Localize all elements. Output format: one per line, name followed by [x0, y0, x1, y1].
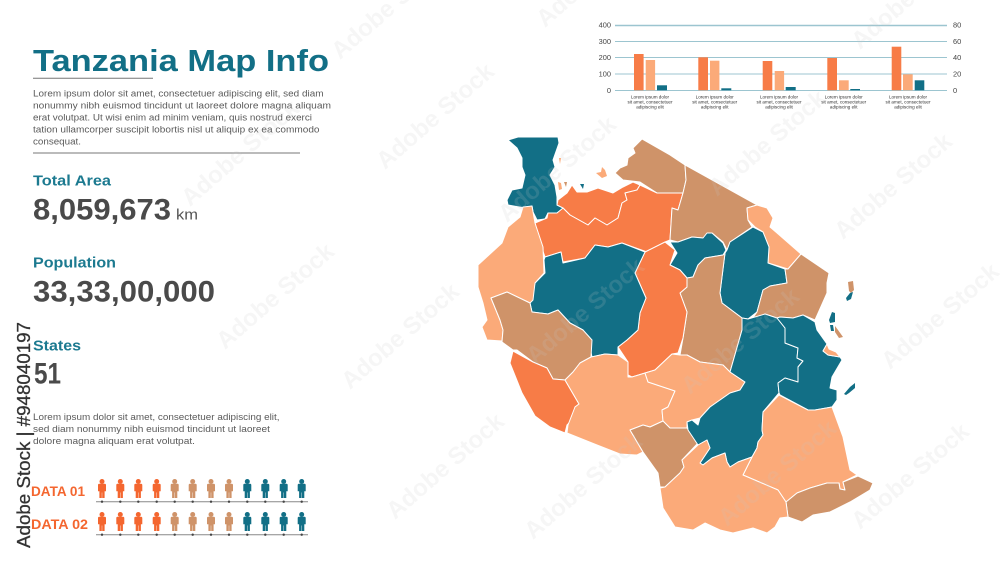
region: small southern tan [630, 421, 698, 487]
watermark: Adobe Stock [846, 417, 975, 535]
region: small coast peach [823, 344, 840, 357]
left axis labels: 400 [599, 20, 611, 30]
lower paragraph [33, 412, 280, 447]
pictogram row: data 02: DATA 02 [31, 516, 88, 532]
region: coast peach [747, 205, 801, 269]
left axis labels: 200 [599, 53, 611, 62]
left axis labels: 100 [599, 70, 611, 78]
left axis labels: 300 [599, 37, 611, 46]
bar captions: Lorem ipsum dolor [760, 94, 798, 100]
bar captions: adipiscing elit [894, 104, 923, 110]
region: central orange [618, 242, 687, 377]
region: lake orange [557, 182, 640, 225]
region: inland teal north-east [720, 227, 787, 319]
region: small teal [670, 233, 726, 278]
lower paragraph: sed diam nonummy nibh euismod tincidunt ut laoreet [33, 424, 270, 435]
region: south-west orange [510, 351, 579, 433]
stat: total area: km [176, 206, 198, 223]
right axis labels: 80 [953, 20, 961, 30]
region: central tan [680, 253, 742, 372]
right axis labels [953, 20, 961, 95]
region: long teal [687, 314, 803, 467]
bar captions: adipiscing elit [830, 104, 858, 110]
region: north tan [615, 139, 686, 193]
bar captions: adipiscing elit [701, 104, 729, 110]
bars group 4 [827, 58, 860, 90]
bar captions: sit amet, consectetuer [821, 100, 867, 104]
pictogram row: data 02 [31, 512, 308, 536]
region: south-east tan [786, 476, 873, 522]
watermark: Adobe Stock [713, 414, 842, 532]
right axis labels: 40 [953, 53, 961, 62]
stat: population: Population [33, 254, 116, 271]
bar captions: sit amet, consectetuer [692, 100, 738, 104]
bars group 5 [892, 47, 924, 90]
bars group 2 [698, 57, 731, 90]
right axis labels: 60 [953, 37, 961, 46]
right axis labels: 0 [953, 86, 957, 95]
left axis labels: 0 [607, 86, 611, 95]
pictogram row: data 01 [31, 479, 308, 503]
region: western peach [478, 206, 544, 341]
bar captions: Lorem ipsum dolor [889, 94, 927, 100]
stat: total area: Total Area [33, 172, 112, 189]
pictogram row: data 01: DATA 01 [31, 483, 85, 499]
watermark: Adobe Stock [676, 282, 805, 400]
bar chart [599, 20, 961, 110]
watermark: Adobe Stock [829, 127, 958, 245]
region: north-west teal [507, 137, 564, 220]
intro paragraph [33, 88, 331, 148]
stat: total area: 8,059,673 [33, 193, 171, 226]
intro paragraph: tation ullamcorper suscipit lobortis nisl ut aliquip ex ea commodo [33, 124, 320, 136]
region: large western teal [530, 243, 646, 357]
bar captions: Lorem ipsum dolor [631, 94, 669, 100]
bars group 1 [634, 54, 667, 90]
region: south-central peach [645, 354, 745, 428]
lower paragraph: dolore magna aliquam erat volutpat. [33, 436, 195, 447]
watermark: Adobe Stock [371, 57, 500, 175]
left axis labels [599, 20, 611, 95]
intro paragraph: erat volutpat. Ut wisi enim ad minim veniam, quis nostrud exerci [33, 112, 312, 124]
islands [558, 158, 855, 395]
stat: states: 51 [34, 357, 61, 390]
watermark: Adobe Stock [521, 252, 650, 370]
watermark: Adobe Stock [336, 277, 465, 395]
region: southern highlands peach [565, 354, 675, 455]
watermark: Adobe Stock [493, 110, 622, 228]
watermark: Adobe Stock [176, 94, 305, 212]
region: south-west tan [491, 292, 592, 380]
bar captions: sit amet, consectetuer [628, 100, 673, 104]
intro paragraph: consequat. [33, 136, 81, 148]
map of Tanzania [478, 137, 873, 533]
region: east coast tan [750, 254, 829, 322]
bar captions: Lorem ipsum dolor [696, 94, 734, 100]
bars group 3 [763, 61, 796, 90]
watermark: Adobe Stock [703, 84, 832, 202]
watermark [176, 0, 1000, 545]
region: southern peach [660, 440, 788, 533]
region: eastern teal [777, 315, 842, 410]
intro paragraph: nonummy nibh euismod tincidunt ut laoreet dolore magna aliquam [33, 100, 331, 112]
stat: population [33, 254, 215, 309]
watermark: Adobe Stock [211, 237, 340, 355]
stat: states: States [33, 338, 81, 355]
title: Tanzania Map Info [33, 43, 329, 78]
bar captions: adipiscing elit [765, 104, 794, 110]
watermark: Adobe Stock [519, 427, 648, 545]
bar captions: sit amet, consectetuer [886, 100, 931, 104]
stat: population: 33,33,00,000 [33, 276, 215, 309]
stock ID vertical text: Adobe Stock | #948040197 [13, 322, 34, 548]
bar captions: Lorem ipsum dolor [825, 94, 863, 100]
bar captions [628, 94, 931, 110]
region: central-north orange [535, 185, 683, 262]
bar captions: adipiscing elit [636, 104, 665, 110]
lower paragraph: Lorem ipsum dolor sit amet, consectetuer adipiscing elit, [33, 412, 280, 423]
bar captions: sit amet, consectetuer [757, 100, 802, 104]
right axis labels: 20 [953, 70, 961, 78]
region: north-east tan [670, 165, 757, 250]
stat: states [33, 338, 81, 390]
region: south-east peach [743, 395, 857, 502]
watermark: Adobe Stock [381, 407, 510, 525]
stat: total area [33, 172, 198, 226]
intro paragraph: Lorem ipsum dolor sit amet, consectetuer adipiscing elit, sed diam [33, 88, 324, 100]
